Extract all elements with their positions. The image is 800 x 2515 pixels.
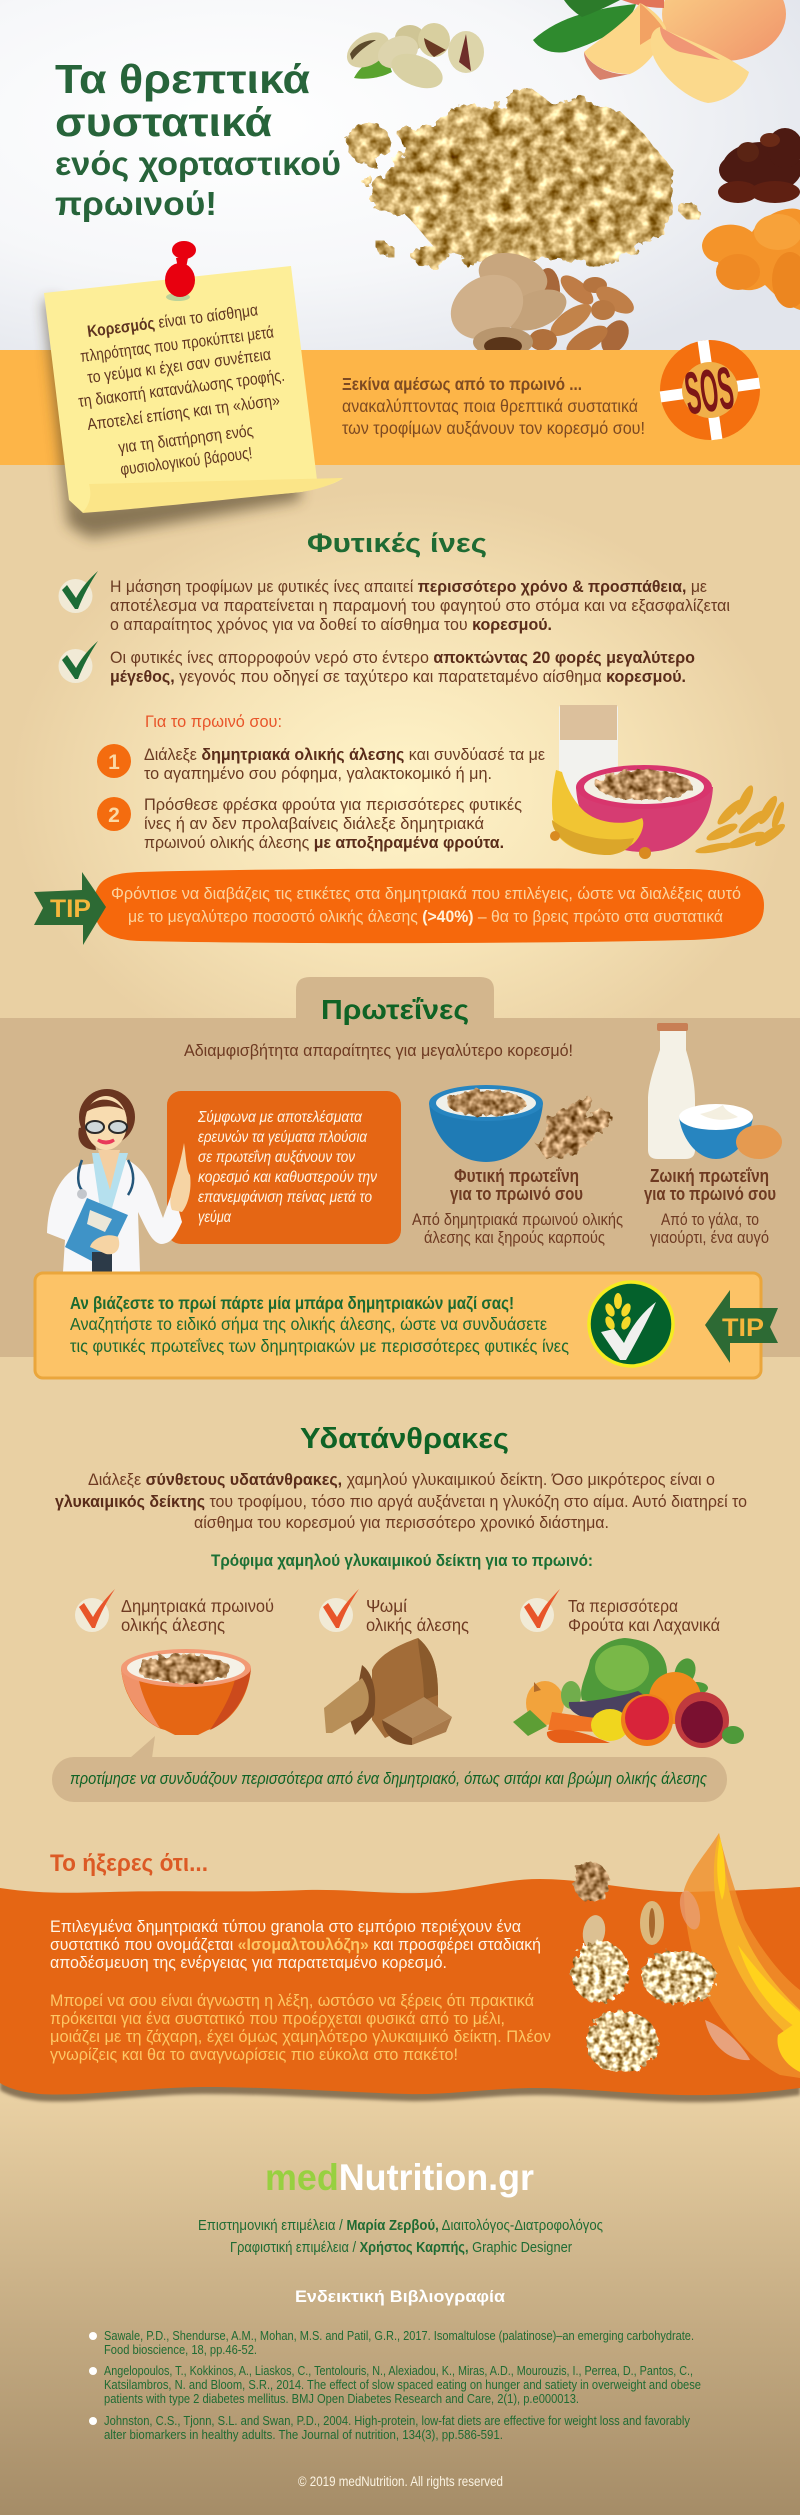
callout: προτίμησε να συνδυάζουν περισσότερα από ένα δημητριακό, όπως σιτάρι και βρώμη ολικής άλεσης: [70, 1769, 708, 1788]
tip 2: Πρόσθεσε φρέσκα φρούτα για περισσότερες φυτικές: [144, 796, 522, 814]
icon: SOS lifebuoy: SOS: [681, 354, 738, 427]
fibre bullet 2: μέγεθος, γεγονός που οδηγεί σε ταχύτερο και παρατεταμένο αίσθημα κορεσμού.: [110, 668, 686, 686]
heading: carbohydrates: Υδατάνθρακες: [300, 1423, 509, 1455]
did you know text: μοιάζει με τη ζάχαρη, έχει όμως χαμηλότερο γλυκαιμικό δείκτη. Πλέον: [50, 2028, 551, 2046]
tip 2: 2: [108, 804, 120, 827]
references: alter biomarkers in healthy adults. The Journal of nutrition, 134(3), pp.586-591.: [104, 2427, 503, 2442]
tip 2: ίνες ή αν δεν προλαβαίνεις διάλεξε δημητριακά: [144, 815, 484, 833]
illustration: doctor: [47, 1089, 191, 1272]
photo: almonds: [439, 246, 638, 360]
references: Johnston, C.S., Tjonn, S.L. and Swan, P.D., 2004. High-protein, low-fat diets are effective for weight loss and favorably: [104, 2413, 690, 2428]
check item: cereal: [75, 1589, 274, 1635]
plant protein text: άλεσης και ξηρούς καρπούς: [424, 1229, 605, 1247]
tip banner: labels: με το μεγαλύτερο ποσοστό ολικής άλεσης (>40%) – θα το βρεις πρώτο στα συστατικά: [128, 907, 723, 926]
references: patients with type 2 diabetes mellitus. BMJ Open Diabetes Research and Care, 2(1), p.e000013.: [104, 2391, 579, 2406]
illustration: orange cereal bowl: [121, 1649, 251, 1735]
plant protein text: Από δημητριακά πρωινού ολικής: [412, 1211, 623, 1229]
fibre bullet 1: αποτέλεσμα να παρατείνεται η παραμονή του φαγητού στο στόμα και να εξασφαλίζεται: [110, 597, 730, 615]
logo: medNutrition.gr: [265, 2157, 534, 2198]
speech box: [167, 1091, 401, 1244]
copyright: © 2019 medNutrition. All rights reserved: [298, 2474, 503, 2489]
carbohydrates text: [55, 1470, 747, 1532]
intro text: [342, 374, 645, 438]
credits: Επιστημονική επιμέλεια / Μαρία Ζερβού, Διαιτολόγος-Διατροφολόγος: [198, 2217, 603, 2234]
illustration: granola clusters: [571, 1862, 716, 2073]
title: πρωινού!: [55, 185, 217, 222]
sticky note: για τη διατήρηση ενός: [117, 422, 254, 457]
tip banner: labels: [94, 868, 764, 943]
animal protein text: γιαούρτι, ένα αυγό: [650, 1229, 769, 1247]
sticky note: φυσιολογικού βάρους!: [119, 444, 253, 479]
illustration: fruit and vegetables: [513, 1638, 744, 1748]
photo: granola: [347, 88, 700, 268]
TIP arrow: [34, 872, 106, 945]
animal protein text: Από το γάλα, το: [661, 1211, 759, 1229]
tip banner: labels: Φρόντισε να διαβάζεις τις ετικέτες στα δημητριακά που επιλέγεις, ώστε να διαλέξεις αυτό: [111, 884, 741, 903]
credits: [198, 2217, 603, 2256]
tip 2: [97, 796, 522, 852]
heading: did you know: Το ήξερες ότι...: [50, 1850, 208, 1877]
speech box: Σύμφωνα με αποτελέσματα: [197, 1109, 363, 1126]
callout: [52, 1736, 727, 1802]
references: Angelopoulos, T., Kokkinos, A., Liaskos, C., Tentolouris, N., Alexiadou, K., Miras, A.D., Mourouzis, I., Perrea, D., Pantos, C.,: [104, 2363, 693, 2378]
tip 2: πρωινού ολικής άλεσης με αποξηραμένα φρούτα.: [144, 834, 504, 852]
illustration: wholegrain bread: [324, 1638, 452, 1745]
animal protein text: [644, 1165, 776, 1247]
orange intro band: [0, 350, 800, 465]
carbohydrates text: αίσθημα του κορεσμού για περισσότερο χρονικό διάστημα.: [194, 1513, 609, 1532]
panel: cereal bar tip: Αν βιάζεστε το πρωί πάρτε μία μπάρα δημητριακών μαζί σας!: [70, 1293, 514, 1314]
tip 1: το αγαπημένο σου ρόφημα, γαλακτοκομικό ή μη.: [144, 765, 492, 783]
sticky note: Κορεσμός είναι το αίσθημα: [86, 301, 259, 341]
credits: Γραφιστική επιμέλεια / Χρήστος Καρπής, Graphic Designer: [230, 2239, 572, 2256]
references: Katsilambros, N. and Bloom, S.R., 2014. The effect of slow spaced eating on hunger and satiety in overweight and obese: [104, 2377, 701, 2392]
TIP arrow left: [705, 1290, 778, 1363]
panel: did you know wave: [0, 1879, 800, 2102]
references: Sawale, P.D., Shendurse, A.M., Mohan, M.S. and Patil, G.R., 2017. Isomaltulose (palatinose)–an emerging carbohydrate.: [104, 2328, 694, 2343]
did you know text: πρόκειται για ένα συστατικό που προέρχεται φυσικά από το μέλι,: [50, 2010, 505, 2028]
fibre bullet 1: ο απαραίτητος χρόνος για να δοθεί το αίσθημα του κορεσμού.: [110, 616, 552, 634]
speech box: ερευνών τα γεύματα πλούσια: [198, 1129, 368, 1146]
intro text: ανακαλύπτοντας ποια θρεπτικά συστατικά: [342, 396, 638, 416]
check item: fruit and vegetables: [520, 1589, 720, 1635]
photo: dates: [718, 128, 800, 203]
did you know text: συστατικό που ονομάζεται «Ισομαλτουλόζη» και προσφέρει σταδιακή: [50, 1936, 541, 1954]
icon: SOS lifebuoy: [654, 334, 766, 446]
plant protein text: Φυτική πρωτεΐνη: [454, 1165, 579, 1186]
speech box: γεύμα: [198, 1209, 232, 1226]
illustration: cereal bowl with bars: [429, 1085, 612, 1162]
tip 1: [97, 744, 546, 783]
TIP arrow left: TIP: [722, 1314, 764, 1342]
sticky note: [44, 266, 343, 513]
speech box: επανεμφάνιση πείνας μετά το: [198, 1189, 372, 1206]
intro text: Ξεκίνα αμέσως από το πρωινό ...: [342, 374, 582, 394]
sticky note: το γεύμα κι έχει σαν συνέπεια: [86, 346, 272, 387]
check item: fruit and vegetables: Τα περισσότερα: [568, 1596, 678, 1616]
low glycemic subheading: Τρόφιμα χαμηλού γλυκαιμικού δείκτη για το πρωινό:: [211, 1551, 593, 1570]
panel: cereal bar tip: Αναζητήστε το ειδικό σήμα της ολικής άλεσης, ώστε να συνδυάσετε: [70, 1314, 547, 1334]
did you know text: γνωρίζεις και θα το αναγνωρίσεις πιο εύκολα στο πακέτο!: [50, 2046, 458, 2064]
plant protein text: για το πρωινό σου: [450, 1183, 583, 1204]
speech box: κορεσμό και καθυστερούν την: [198, 1169, 377, 1186]
carbohydrates text: γλυκαιμικός δείκτης του τροφίμου, τόσο πιο αργά αυξάνεται η γλυκόζη στο αίμα. Αυτό διατηρεί το: [55, 1492, 747, 1511]
check item: cereal: Δημητριακά πρωινού: [121, 1596, 274, 1616]
sticky note shadow: [44, 300, 300, 538]
fibre bullet 2: [58, 641, 695, 686]
icon: red pin: [165, 241, 196, 297]
illustration: wheat swoosh: [676, 1833, 800, 2078]
check item: bread: Ψωμί: [366, 1596, 407, 1616]
title: [55, 56, 341, 222]
panel: cereal bar tip: [35, 1273, 761, 1378]
photo: dried apricots: [702, 208, 800, 310]
icon: whole grain badge: [589, 1282, 673, 1366]
illustration: milk, yoghurt, egg: [648, 1023, 782, 1159]
speech box: σε πρωτεΐνη αυξάνουν τον: [198, 1149, 355, 1166]
carbohydrates text: Διάλεξε σύνθετους υδατάνθρακες, χαμηλού γλυκαιμικού δείκτη. Όσο μικρότερος είναι ο: [88, 1470, 715, 1489]
check item: bread: ολικής άλεσης: [366, 1615, 469, 1635]
fibre bullet 2: Οι φυτικές ίνες απορροφούν νερό στο έντερο αποκτώντας 20 φορές μεγαλύτερο: [110, 649, 695, 667]
fibre bullet 1: Η μάσηση τροφίμων με φυτικές ίνες απαιτεί περισσότερο χρόνο & προσπάθεια, με: [110, 578, 708, 596]
check item: cereal: ολικής άλεσης: [121, 1615, 225, 1635]
panel: proteins: [0, 977, 800, 1357]
illustration: milk, cereal bowl, banana, wheat: [550, 705, 788, 859]
heading: fibre: Φυτικές ίνες: [307, 528, 487, 558]
proteins subtitle: Αδιαμφισβήτητα απαραίτητες για μεγαλύτερο κορεσμό!: [184, 1041, 573, 1060]
photo: peaches and leaf: [533, 0, 786, 103]
sticky note: τη διακοπή κατανάλωσης τροφής.: [77, 367, 286, 411]
check item: fruit and vegetables: Φρούτα και Λαχανικά: [568, 1615, 720, 1635]
TIP arrow: TIP: [50, 895, 91, 923]
intro text: των τροφίμων αυξάνουν τον κορεσμό σου!: [342, 418, 645, 438]
tip 1: Διάλεξε δημητριακά ολικής άλεσης και συνδύασέ τα με: [144, 746, 546, 764]
did you know text: Μπορεί να σου είναι άγνωστη η λέξη, ωστόσο να ξέρεις ότι πρακτικά: [50, 1992, 534, 2010]
heading: proteins: Πρωτεΐνες: [321, 994, 469, 1025]
references: Food bioscience, 18, pp.46-52.: [104, 2342, 257, 2357]
did you know text: αποδέσμευση της ενέργειας για παρατεταμένο κορεσμό.: [50, 1954, 447, 1972]
photo: pistachios: [341, 23, 484, 95]
title: συστατικά: [55, 99, 272, 145]
did you know text: Επιλεγμένα δημητριακά τύπου granola στο εμπόριο περιέχουν ένα: [50, 1918, 521, 1936]
sticky note: πληρότητας που προκύπτει μετά: [79, 323, 275, 366]
plant protein text: [412, 1165, 623, 1247]
panel: cereal bar tip: τις φυτικές πρωτεΐνες των δημητριακών με περισσότερες φυτικές ίνες: [70, 1336, 569, 1356]
title: ενός χορταστικού: [55, 145, 341, 182]
animal protein text: Ζωική πρωτεΐνη: [650, 1165, 769, 1186]
sticky note: Αποτελεί επίσης και τη «λύση»: [86, 391, 281, 434]
breakfast tips subheading: Για το πρωινό σου:: [145, 712, 282, 731]
references heading: Ενδεικτική Βιβλιογραφία: [295, 2287, 506, 2306]
check item: bread: [319, 1589, 469, 1635]
references: [89, 2328, 701, 2442]
did you know text: [50, 1918, 551, 2064]
tip 1: 1: [108, 751, 120, 774]
title: Τα θρεπτικά: [55, 56, 310, 102]
fibre bullet 1: [58, 571, 730, 634]
